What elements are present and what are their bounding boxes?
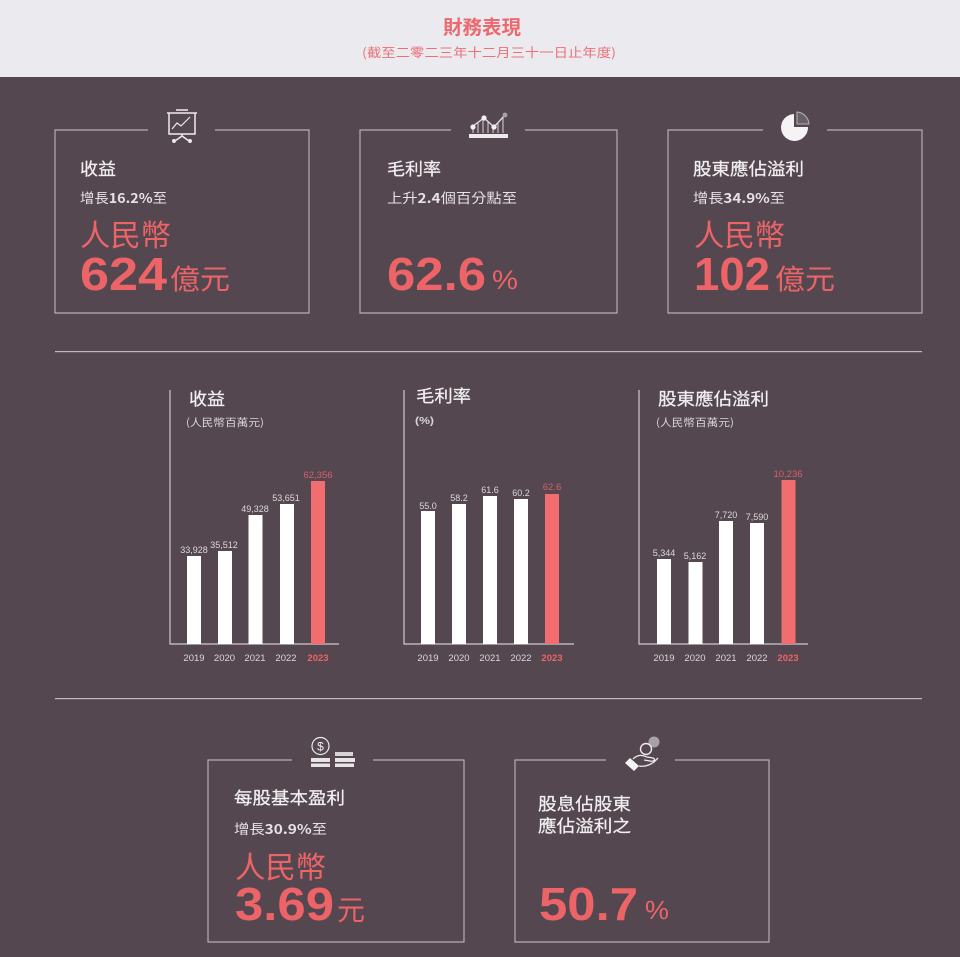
header band — [0, 0, 960, 77]
chart unit: (%) — [415, 415, 434, 427]
heading line 1: 股息佔股東 — [538, 790, 631, 815]
big number: 624 — [80, 248, 167, 300]
bar chart: revenue: 49,328 — [241, 504, 269, 514]
bar chart: profit attributable to shareholders: 2019 — [653, 653, 675, 664]
bar chart: profit attributable to shareholders: 2021 — [715, 653, 737, 664]
bar chart: profit attributable to shareholders: 10,236 — [773, 469, 803, 480]
bar chart: revenue: 33,928 — [180, 545, 208, 555]
icon: dollar coin and stacks: $ — [317, 740, 324, 754]
bar chart: gross margin: 2019 — [417, 653, 439, 664]
percent sign: % — [492, 265, 518, 295]
bar chart: gross margin: 2023 — [541, 653, 563, 664]
unit: 億元 — [775, 258, 835, 298]
heading: 每股基本盈利 — [234, 784, 345, 809]
chart heading: 收益 — [189, 385, 225, 410]
bar chart: revenue — [170, 385, 339, 664]
bar chart: gross margin: 2020 — [448, 653, 470, 664]
bar chart: gross margin — [404, 382, 574, 664]
chart unit: (人民幣百萬元) — [656, 415, 734, 430]
bar chart: gross margin: 55.0 — [419, 501, 437, 511]
big number: 50.7 — [539, 878, 638, 930]
panel: revenue — [55, 110, 309, 313]
bar chart: revenue: 62,356 — [303, 470, 333, 481]
currency label: 人民幣 — [694, 211, 785, 255]
icon: hand holding coin — [625, 736, 660, 771]
bar chart: profit attributable to shareholders: 5,162 — [684, 551, 706, 561]
bar chart: profit attributable to shareholders — [639, 385, 808, 664]
heading: revenue: 收益 — [80, 155, 116, 180]
bar chart: revenue: 2023 — [307, 653, 329, 664]
big number: 102 — [694, 248, 770, 300]
bar chart: profit attributable to shareholders: 5,344 — [653, 548, 675, 558]
icon: line chart — [469, 113, 508, 138]
panel: basic earnings per share — [208, 738, 464, 942]
title: 財務表現 — [443, 11, 521, 40]
bar chart: profit attributable to shareholders: 2022 — [746, 653, 768, 664]
change text: 上升 2.4個百分點至 — [387, 187, 517, 207]
bar chart: gross margin: 58.2 — [450, 493, 468, 503]
bar chart: gross margin: 60.2 — [512, 488, 530, 498]
big number: 62.6 — [387, 248, 486, 300]
bar chart: profit attributable to shareholders: 2023 — [777, 653, 799, 664]
growth text: 增長16.2%至 — [80, 187, 167, 207]
subtitle: (截至二零二三年十二月三十一日止年度) — [362, 42, 616, 61]
bar chart: revenue: 2019 — [183, 653, 205, 664]
panel: gross margin — [360, 113, 617, 313]
heading line 2: 應佔溢利之 — [538, 812, 631, 837]
bar chart: profit attributable to shareholders: 7,590 — [746, 512, 768, 522]
bar chart: gross margin: 2021 — [479, 653, 501, 664]
big number: 3.69 — [235, 878, 334, 930]
bar chart: gross margin: 61.6 — [481, 485, 499, 495]
bar chart: revenue: 2021 — [244, 653, 266, 664]
panel: profit attributable to shareholders — [668, 112, 922, 313]
growth text: 增長34.9% 至 — [693, 187, 785, 207]
heading: gross margin: 毛利率 — [387, 155, 441, 180]
growth text: 增長 30.9% 至 — [234, 818, 327, 838]
unit: 元 — [337, 889, 365, 929]
bar chart: profit attributable to shareholders: 7,720 — [715, 510, 737, 520]
icon: pie chart — [781, 112, 809, 141]
currency label: 人民幣 — [80, 211, 171, 255]
currency label: 人民幣 — [235, 843, 326, 887]
chart heading: 毛利率 — [416, 382, 471, 407]
percent sign: % — [645, 895, 669, 925]
bar chart: revenue: 2022 — [275, 653, 297, 664]
bar chart: revenue: 35,512 — [210, 540, 238, 550]
panel: dividend payout ratio — [515, 736, 769, 942]
heading: 股東應佔溢利 — [693, 155, 804, 180]
bar chart: revenue: 2020 — [214, 653, 235, 664]
bar chart: gross margin: 62.6 — [543, 482, 561, 493]
bar chart: revenue: 53,651 — [272, 493, 300, 503]
bar chart: profit attributable to shareholders: 2020 — [684, 653, 706, 664]
icon: dollar coin and stacks — [311, 738, 355, 767]
bar chart: gross margin: 2022 — [510, 653, 532, 664]
icon: presentation board — [167, 110, 197, 142]
unit: 億元 — [170, 258, 230, 298]
chart unit: (人民幣百萬元) — [186, 415, 264, 430]
chart heading: 股東應佔溢利 — [658, 385, 769, 410]
